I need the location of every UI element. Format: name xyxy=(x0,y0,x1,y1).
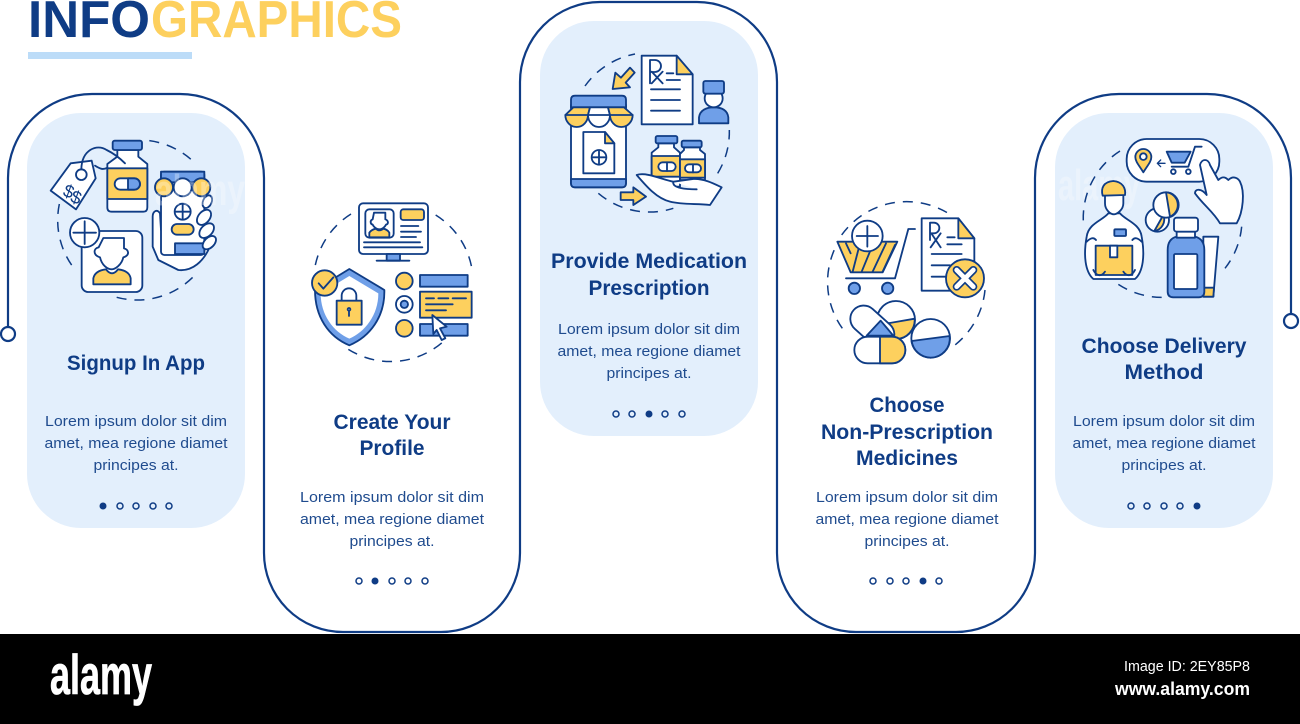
heading: Signup In App xyxy=(67,351,205,375)
card background xyxy=(27,113,245,528)
body text: amet, mea regione diamet xyxy=(1072,435,1256,452)
shield with lock xyxy=(312,269,384,345)
form options xyxy=(396,273,472,340)
price tag: $ xyxy=(61,180,77,203)
body text: Lorem ipsum dolor sit dim xyxy=(558,321,740,338)
panel: choose delivery method xyxy=(1055,113,1273,528)
hand and phone xyxy=(153,172,219,270)
footer bar xyxy=(0,634,1300,724)
doctor xyxy=(699,81,728,123)
shopping cart xyxy=(837,221,915,294)
footer url: www.alamy.com xyxy=(1114,679,1250,699)
icon: medicine, tag, phone, profile xyxy=(51,141,219,300)
body text: principes at. xyxy=(94,457,178,474)
courier xyxy=(1085,181,1143,279)
pills xyxy=(1146,192,1179,232)
body text: principes at. xyxy=(606,365,692,382)
location and cart bubble xyxy=(1127,139,1219,182)
body text: amet, mea regione diamet xyxy=(816,511,999,528)
arrow out xyxy=(621,187,646,205)
watermark: alamy xyxy=(155,166,245,215)
heading: Choose xyxy=(870,393,945,417)
heading xyxy=(334,410,451,460)
profile card xyxy=(70,218,142,292)
body text xyxy=(816,489,999,550)
heading: Profile xyxy=(360,436,425,460)
body text: Lorem ipsum dolor sit dim xyxy=(816,489,998,506)
price tag: $ xyxy=(68,186,84,209)
card background xyxy=(540,21,758,436)
heading: Choose Delivery xyxy=(1082,334,1247,358)
pagination dots xyxy=(1128,502,1200,510)
card background xyxy=(1055,113,1273,528)
heading: Non-Prescription xyxy=(821,420,993,444)
image id: Image ID: 2EY85P8 xyxy=(1124,659,1250,675)
icon: monitor, shield, form xyxy=(312,203,472,362)
arrow in xyxy=(613,68,635,89)
body text: principes at. xyxy=(1122,457,1206,474)
body text xyxy=(558,321,741,382)
body text: Lorem ipsum dolor sit dim xyxy=(1073,413,1255,430)
heading xyxy=(551,249,747,300)
title xyxy=(28,0,402,49)
monitor xyxy=(359,203,428,261)
prescription sheet xyxy=(642,56,693,124)
bottle xyxy=(107,141,147,212)
bottle and tube xyxy=(1168,218,1218,297)
watermark: alamy xyxy=(1058,161,1140,210)
body text: Lorem ipsum dolor sit dim xyxy=(45,413,227,430)
body text: Lorem ipsum dolor sit dim xyxy=(300,489,484,506)
body text: principes at. xyxy=(350,533,434,550)
title underline xyxy=(28,52,192,59)
pagination dots xyxy=(100,502,172,510)
panel: provide medication prescription xyxy=(540,21,758,436)
heading: Medicines xyxy=(856,446,958,470)
panel: choose non-prescription medicines xyxy=(816,202,999,584)
footer logo: alamy xyxy=(50,643,152,706)
heading: Create Your xyxy=(334,410,451,434)
body text: principes at. xyxy=(864,533,950,550)
body text: amet, mea regione diamet xyxy=(44,435,228,452)
heading: Prescription xyxy=(588,276,710,300)
panel: create your profile xyxy=(300,203,485,585)
body text: amet, mea regione diamet xyxy=(300,511,485,528)
pagination dots xyxy=(870,578,942,584)
pagination dots xyxy=(613,410,685,418)
heading: Provide Medication xyxy=(551,249,747,273)
pointing hand xyxy=(1195,160,1243,223)
medicine bottles xyxy=(652,136,705,187)
price tag xyxy=(51,147,125,209)
storefront phone xyxy=(565,96,633,187)
rx sheet with cross xyxy=(922,218,984,297)
right end node xyxy=(1284,314,1298,328)
icon: cart, prescription, pills xyxy=(828,202,985,363)
heading xyxy=(1082,334,1247,384)
body text xyxy=(300,489,485,550)
pills xyxy=(845,300,950,363)
body text xyxy=(44,413,228,474)
heading xyxy=(821,393,993,470)
heading: Method xyxy=(1124,360,1204,384)
body text: amet, mea regione diamet xyxy=(558,343,741,360)
hand xyxy=(637,174,722,205)
pagination dots xyxy=(356,578,428,584)
left end node xyxy=(1,327,15,341)
icon: courier, cart bubble, medicine xyxy=(1083,139,1243,297)
body text xyxy=(1072,413,1256,474)
panel: signup in app xyxy=(27,113,245,528)
icon: pharmacy, prescription, doctor, bottles xyxy=(565,54,729,212)
